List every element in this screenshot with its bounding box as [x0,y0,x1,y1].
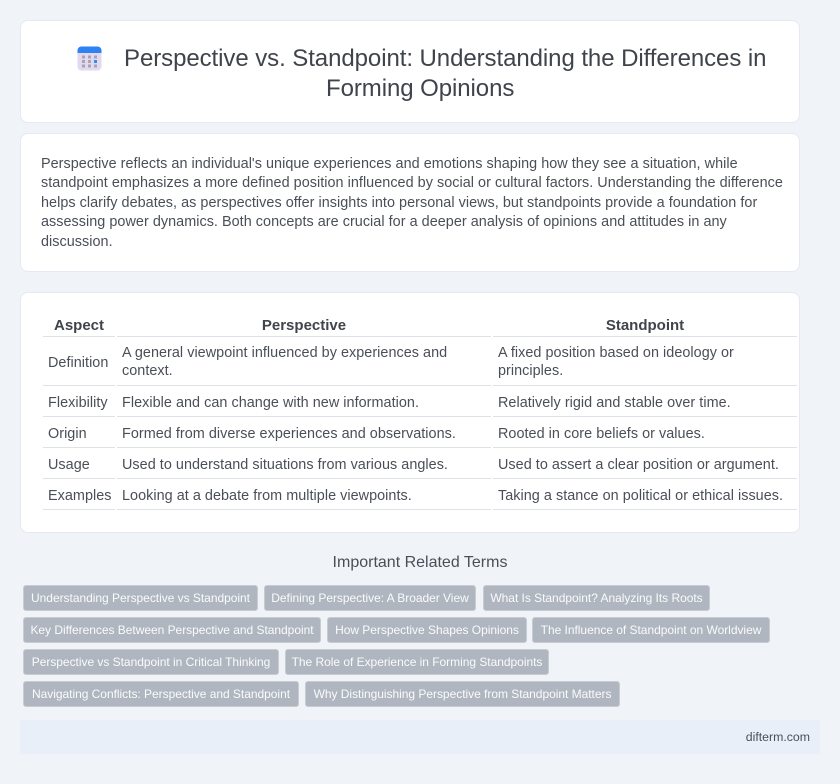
row: flexibility: Relatively rigid and stable over time. [498,395,731,411]
title: Perspective vs. Standpoint: Understanding the Differences in [124,45,766,72]
row: usage: Usage [48,457,90,473]
title [124,45,766,102]
row: flexibility: Flexibility [48,395,108,411]
tag: What Is Standpoint? Analyzing Its Roots [490,591,703,605]
text block: intro paragraph: standpoint emphasizes a more defined position influenced by social or cultural factors. Understanding the difference [41,175,783,191]
panel: intro text [20,133,800,272]
tag [305,681,620,707]
tag [264,585,476,611]
table header [54,317,684,334]
table header: Standpoint [606,317,684,334]
tag: Defining Perspective: A Broader View [271,591,469,605]
row: flexibility [48,395,731,411]
tag [23,681,299,707]
tag [532,617,770,643]
row: examples: Looking at a debate from multiple viewpoints. [122,488,412,504]
row: definition: Definition [48,355,108,371]
row: definition [48,345,734,379]
tag: Perspective vs Standpoint in Critical Thinking [32,655,270,669]
row: definition: principles. [498,363,563,379]
title: Forming Opinions [326,75,514,102]
row: examples: Examples [48,488,112,504]
panel: comparison table [20,292,800,533]
tag: The Influence of Standpoint on Worldview [541,623,761,637]
tag [23,617,321,643]
row: origin: Rooted in core beliefs or values. [498,426,705,442]
panel: related term tags [23,585,770,707]
tag [23,585,258,611]
tag [327,617,527,643]
row: flexibility: Flexible and can change with new information. [122,395,419,411]
tag [285,649,549,675]
row: examples [48,488,783,504]
row: usage: Used to understand situations from various angles. [122,457,448,473]
table header: Aspect [54,317,104,334]
row: origin: Formed from diverse experiences and observations. [122,426,456,442]
tag: Navigating Conflicts: Perspective and Standpoint [32,687,290,701]
row: usage [48,457,779,473]
row: definition: context. [122,363,173,379]
panel: header [20,20,800,123]
tag: Understanding Perspective vs Standpoint [31,591,250,605]
tag: Key Differences Between Perspective and Standpoint [30,623,314,637]
tag: Why Distinguishing Perspective from Standpoint Matters [314,687,611,701]
row: origin [48,426,705,442]
text block: intro paragraph: assessing power dynamics. Both concepts are crucial for a deeper analysis of opinions and attitudes in any [41,214,727,230]
row: origin: Origin [48,426,87,442]
footer bar [20,720,820,754]
row: definition: A general viewpoint influenced by experiences and [122,345,447,361]
text block: intro paragraph [41,156,783,250]
tag: How Perspective Shapes Opinions [335,623,519,637]
tag [483,585,710,611]
text block: intro paragraph: helps clarify debates, as perspectives offer insights into personal views, but standpoints provide a foundation for [41,195,757,211]
row: usage: Used to assert a clear position or argument. [498,457,779,473]
table header: Perspective [262,317,346,334]
icon: calendar [78,46,102,70]
heading: important related terms: Important Related Terms [333,554,507,571]
tag [23,649,279,675]
row: definition: A fixed position based on ideology or [498,345,734,361]
text block: intro paragraph: discussion. [41,234,113,250]
footer text: difterm.com: difterm.com [746,730,810,744]
tag: The Role of Experience in Forming Standpoints [292,655,542,669]
text block: intro paragraph: Perspective reflects an individual's unique experiences and emotions shaping how they see a situation, while [41,156,738,172]
row: examples: Taking a stance on political or ethical issues. [498,488,783,504]
